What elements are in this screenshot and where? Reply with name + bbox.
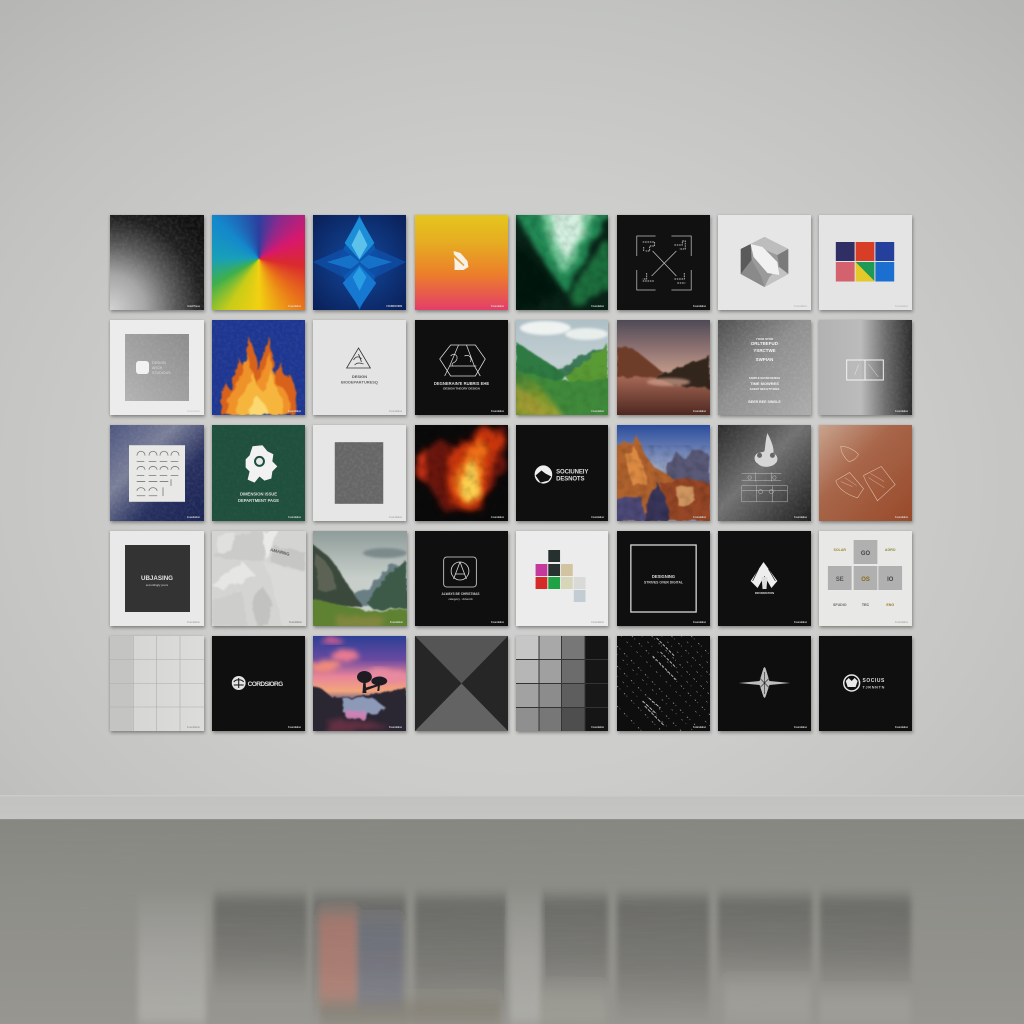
- print: green misty valley: [516, 215, 608, 310]
- print: black hexagon emblem: DEGNERAIN'E RUBRIS EHE: [434, 381, 489, 386]
- print: green misty valley: Foundation: [591, 305, 605, 308]
- print: dusk lake landscape: [617, 320, 710, 415]
- print: light grid of grey tiles and gold glyphs: [819, 531, 912, 626]
- print: light with triangle emblem: DESIGN: [352, 374, 367, 379]
- print: fire on black: Foundation: [491, 516, 505, 519]
- print: green valley landscape: [516, 320, 608, 415]
- print: copper embossed: [819, 425, 912, 521]
- print: silver gradient with double box: Foundation: [895, 410, 909, 413]
- print: crumpled paper: AMARNG: [270, 547, 291, 557]
- print: grey faceted hexagon: [718, 215, 811, 310]
- print: cliffs and meadow landscape: Foundation: [390, 621, 404, 624]
- print: orange gradient with logo: [415, 215, 508, 310]
- print: green with white gear: DIMENSION ISSUE: [240, 492, 277, 497]
- print: light grid of grey tiles and gold glyphs: SFUDIO: [833, 603, 847, 607]
- print: white frame with dark square: [110, 531, 204, 626]
- print: black with four point star: Foundation: [794, 726, 808, 729]
- print: white with colour blocks: [516, 531, 608, 626]
- print: silver with white typography: [718, 320, 811, 415]
- print: silver with white typography: YSRCTWE: [753, 348, 776, 353]
- print: white frame with grey square: STUDIOUS: [152, 371, 171, 375]
- print: black with Southern Designs logo: DESNOTS: [556, 475, 585, 483]
- print: light grid of grey tiles and gold glyphs: GO: [861, 551, 870, 557]
- print: silver with white typography: BEER BEE SINGLE: [748, 400, 781, 404]
- print: white frame with dark square: accordingly yours: [146, 583, 169, 587]
- print: light with triangle emblem: [313, 320, 406, 415]
- print: blue geometric diamonds: FOUNDATION: [386, 305, 402, 308]
- print: white frame with grey square: [110, 320, 204, 415]
- print: cliffs and meadow landscape: [313, 531, 407, 626]
- print: sunlit mountain landscape: Foundation: [693, 516, 707, 519]
- print: black with arrowhead logo: Foundation: [794, 621, 808, 624]
- print: pale grey tile grid: Foundation: [187, 726, 201, 729]
- print: black with arrowhead logo: [718, 531, 811, 626]
- print: colour wheel gradient: [212, 215, 305, 310]
- print: crumpled paper: [212, 531, 306, 626]
- print: sunset with tree: Foundation: [389, 726, 403, 729]
- flame: [221, 337, 297, 415]
- polished concrete floor with reflections: [0, 820, 1024, 1024]
- icon: four point star: [739, 667, 790, 698]
- print: colour wheel gradient: Foundation: [288, 305, 302, 308]
- print: light grid of grey tiles and gold glyphs: Foundation: [895, 621, 909, 624]
- icon sheet: [137, 451, 179, 496]
- icon: round logo: [844, 675, 860, 691]
- print: light grid of grey tiles and gold glyphs: ENG: [886, 603, 894, 607]
- print: black with white square outline: DESIGNING: [652, 574, 675, 579]
- print: light grid of grey tiles and gold glyphs: SE: [836, 577, 844, 583]
- print: black with X and corner brackets: Foundation: [693, 305, 707, 308]
- print: light grid of grey tiles and gold glyphs: IO: [887, 577, 894, 583]
- print: light grid of grey tiles and gold glyphs: AGRO: [885, 548, 896, 552]
- print: black with Southern Designs logo: SOCIUNEIY: [556, 468, 588, 476]
- print: black with compass badge: ALWAYS BE CHRISTMAS: [442, 592, 479, 596]
- print: black gloss texture: Hold Press: [188, 305, 201, 308]
- print: black with four point star: [718, 636, 811, 731]
- icon: hexagon: [440, 345, 485, 376]
- print: silver with white typography: SAMPLE SOUND DESIGN: [749, 376, 780, 380]
- baseboard: [0, 795, 1024, 820]
- icon: drop emblem: [755, 433, 777, 467]
- print: black with Socius logo: TJRNNTN: [863, 685, 885, 690]
- print: black with X and corner brackets: [617, 215, 710, 310]
- print: grey scale grid: Foundation: [591, 726, 605, 729]
- print: white with grey textured square: Foundation: [389, 516, 403, 519]
- print: colour squares grid: Foundation: [895, 305, 909, 308]
- print: fire on black: [415, 425, 508, 521]
- print: navy with white icon sheet: [110, 425, 204, 521]
- print: white frame with grey square: ARCH: [152, 366, 163, 370]
- print: silver gradient with double box: [819, 320, 912, 415]
- icon: round logo: [535, 465, 552, 484]
- print: black with white scratches: [617, 636, 710, 731]
- print: white frame with grey square: Foundation: [187, 410, 201, 413]
- print: black with Southern Designs logo: Foundation: [591, 516, 605, 519]
- print: black with arrowhead logo: INFORMATION: [755, 591, 774, 595]
- print: colour squares grid: [819, 215, 912, 310]
- print: white with grey textured square: [313, 425, 406, 521]
- icon: hexagon: [741, 237, 788, 287]
- print: green with white gear: DEPARTMENT PAGE: [238, 498, 279, 503]
- print: black with circular logo wordmark: Foundation: [288, 726, 302, 729]
- icon: white logo mark: [454, 251, 468, 270]
- print: green with white gear: [212, 425, 305, 521]
- icon: badge: [444, 557, 476, 587]
- print: crumpled paper: Foundation: [289, 621, 303, 624]
- print: silver with white typography: DRLTBEFUD: [751, 341, 779, 346]
- print: white frame with dark square: Foundation: [187, 621, 201, 624]
- print: black with compass badge: Foundation: [491, 621, 505, 624]
- print: black with Socius logo: [819, 636, 912, 731]
- print: black hexagon emblem: [415, 320, 508, 415]
- print: silver with white typography: YOUR STOR: [756, 337, 774, 341]
- print: flames on blue: [212, 320, 305, 415]
- print: light grid of grey tiles and gold glyphs: OS: [861, 577, 870, 583]
- print: black with white square outline: [617, 531, 710, 626]
- print: grey X triangles: [415, 636, 508, 731]
- print: light grid of grey tiles and gold glyphs: TEC: [862, 603, 869, 607]
- icon: double box: [847, 360, 883, 380]
- print: black with Socius logo: SOCIUS: [863, 678, 885, 684]
- print: grey scale grid: [516, 636, 608, 731]
- print: black with Southern Designs logo: [516, 425, 608, 521]
- print: black with compass badge: category - Artwork: [448, 597, 473, 601]
- icon: triangle: [347, 348, 370, 368]
- print: black gloss texture: [110, 215, 204, 310]
- print: black with circular logo wordmark: [212, 636, 305, 731]
- print: black with white scratches: Foundation: [693, 726, 707, 729]
- icon: arrowhead: [751, 562, 777, 589]
- print: sunset with tree: [313, 636, 406, 731]
- print: black with white square outline: Foundation: [693, 621, 707, 624]
- print: black hexagon emblem: DESIGN THEORY DESIGN: [443, 386, 480, 391]
- icon: round logo: [232, 676, 246, 690]
- print: silver with white typography: SWPIAN: [756, 357, 773, 362]
- print: light with triangle emblem: BIODEPARTURESQ: [341, 379, 378, 385]
- print: orange gradient with logo: Foundation: [491, 305, 505, 308]
- print: black with Socius logo: Foundation: [895, 726, 909, 729]
- wall background: [0, 0, 1024, 796]
- print: grey faceted hexagon: Foundation: [794, 305, 808, 308]
- print: navy with white icon sheet: Foundation: [187, 516, 201, 519]
- print: black with white square outline: STRIVES OVER DIGITAL: [644, 580, 683, 585]
- print: pale grey tile grid: [110, 636, 204, 731]
- print: dark silver with drop emblem: Foundation: [794, 516, 808, 519]
- print: dusk lake landscape: Foundation: [693, 410, 707, 413]
- print: white frame with dark square: UBJASING: [141, 575, 173, 582]
- print: green valley landscape: Foundation: [591, 410, 605, 413]
- print: light grid of grey tiles and gold glyphs: SOLAR: [834, 548, 846, 552]
- print: flames on blue: Foundation: [288, 410, 302, 413]
- icon: tree silhouette: [357, 671, 387, 693]
- print: green with white gear: Foundation: [288, 516, 302, 519]
- icon: white glyph: [136, 361, 149, 374]
- print: white with colour blocks: Foundation: [591, 621, 605, 624]
- print: blue geometric diamonds: [313, 215, 406, 310]
- print: sunlit mountain landscape: [617, 425, 710, 521]
- print: black with compass badge: [415, 531, 508, 626]
- print: silver with white typography: TIME MOWRES: [750, 381, 779, 386]
- print: silver with white typography: AGENT DES ETTUDES: [750, 387, 779, 391]
- print: light with triangle emblem: Foundation: [389, 410, 403, 413]
- print: white frame with grey square: DESIGN: [152, 361, 166, 365]
- print: black with circular logo wordmark: CORDSIORG: [248, 681, 283, 688]
- icon: gear: [246, 445, 277, 483]
- print: copper embossed: Foundation: [895, 516, 909, 519]
- print: black hexagon emblem: Foundation: [491, 410, 505, 413]
- print: dark silver with drop emblem: [718, 425, 811, 521]
